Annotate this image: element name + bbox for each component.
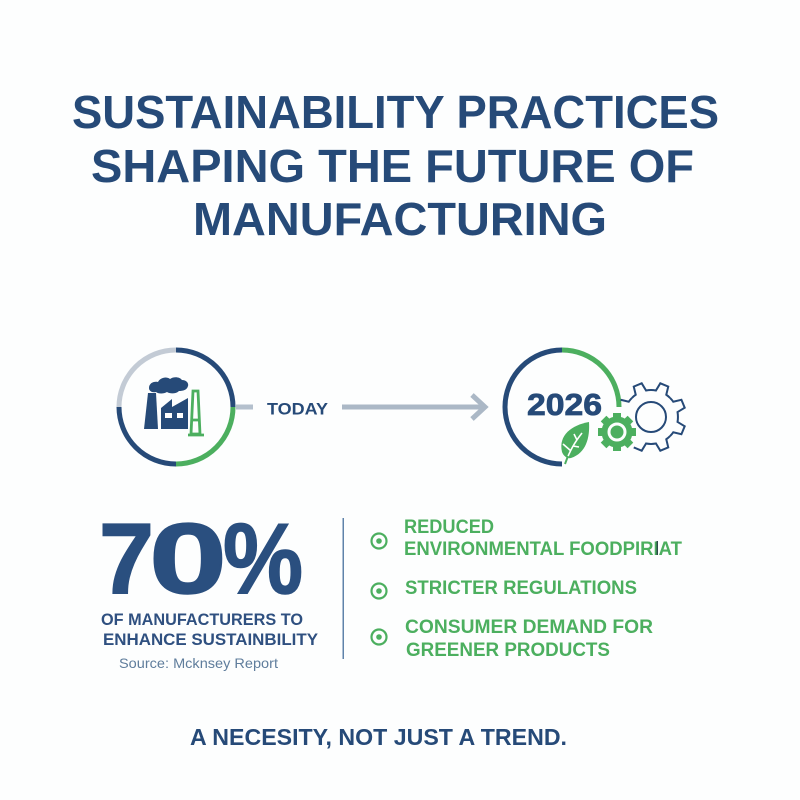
closing statement: A NECESITY, NOT JUST A TREND. bbox=[190, 724, 567, 750]
statistic: 70%: % bbox=[223, 503, 303, 615]
list item: reduced environmental footprint: REDUCED bbox=[404, 517, 494, 538]
statistic: 70% bbox=[99, 503, 303, 615]
title: SHAPING THE FUTURE OF bbox=[91, 140, 694, 192]
statistic description bbox=[101, 610, 319, 649]
list item: consumer demand: CONSUMER DEMAND FOR bbox=[405, 617, 653, 638]
title: SUSTAINABILITY PRACTICES bbox=[72, 86, 719, 138]
icon: 2026 ring with leaf and gears bbox=[505, 350, 687, 464]
connector: ring to today bbox=[236, 404, 253, 410]
list item: consumer demand: GREENER PRODUCTS bbox=[406, 640, 610, 661]
icon: 2026 ring with leaf and gears: 2026 bbox=[527, 387, 602, 422]
title: MANUFACTURING bbox=[193, 193, 607, 245]
statistic: 70%: 0 bbox=[149, 503, 227, 615]
statistic: 70%: 7 bbox=[99, 503, 154, 615]
divider bbox=[342, 518, 344, 659]
icon: factory in segmented ring bbox=[119, 350, 233, 464]
statistic description: OF MANUFACTURERS TO bbox=[101, 610, 303, 629]
list item: stricter regulations: STRICTER REGULATIONS bbox=[405, 578, 637, 599]
title bbox=[72, 86, 719, 245]
label: today: TODAY bbox=[267, 400, 329, 418]
source: Source: Mcknsey Report bbox=[119, 655, 278, 671]
arrow bbox=[342, 395, 485, 419]
list item: reduced environmental footprint bbox=[372, 517, 682, 560]
list item: consumer demand bbox=[372, 617, 653, 661]
list item: reduced environmental footprint: ENVIRONMENTAL FOODPIRIAT bbox=[404, 539, 682, 560]
statistic description: ENHANCE SUSTAINBILITY bbox=[103, 630, 319, 649]
